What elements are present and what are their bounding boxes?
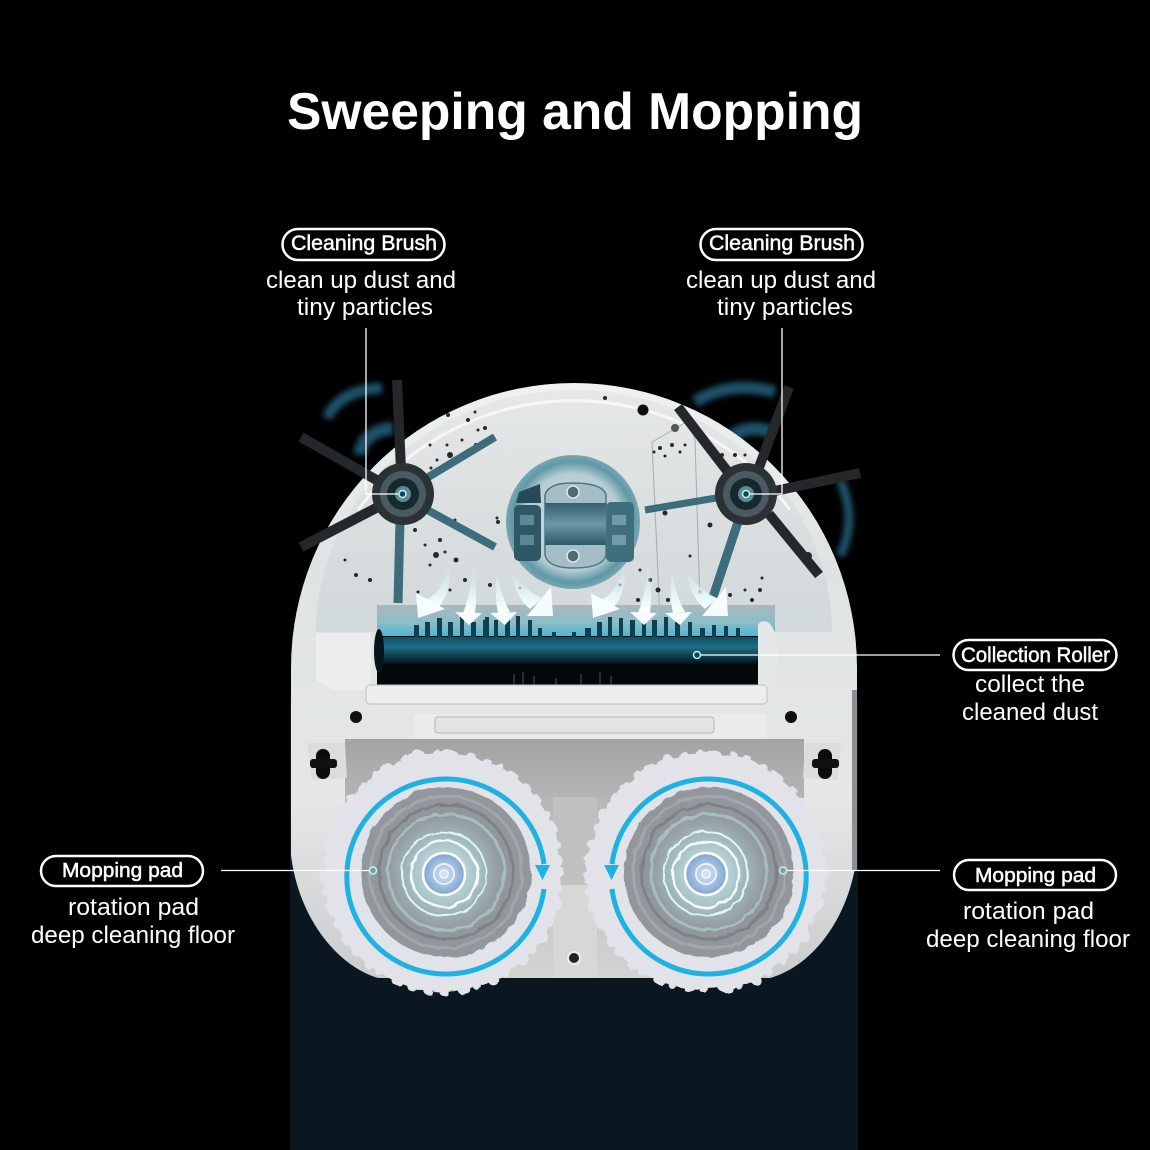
description <box>926 898 1130 953</box>
cavity <box>377 605 775 640</box>
airflow arrows: left group <box>416 560 553 625</box>
description <box>266 267 456 321</box>
mopping pad left <box>324 753 562 991</box>
screw top <box>567 486 579 498</box>
pill label: Cleaning Brush <box>709 232 855 255</box>
caster wheel right <box>803 743 841 780</box>
right wheel <box>606 502 634 562</box>
callout: right mopping pad <box>780 860 1130 953</box>
tray lip <box>366 685 767 704</box>
description: tiny particles <box>297 294 433 321</box>
side brush hub: left <box>372 463 434 525</box>
dome plate <box>316 390 832 632</box>
pill label: Mopping pad <box>975 865 1096 887</box>
side brush dark arms: left <box>301 380 401 547</box>
pill label <box>41 856 203 886</box>
pill label: Collection Roller <box>961 644 1110 667</box>
pill label: Cleaning Brush <box>291 232 437 255</box>
title: Sweeping and Mopping <box>287 83 863 141</box>
description <box>31 894 235 949</box>
dark floor panel <box>290 700 858 1150</box>
collection roller assembly <box>316 605 778 704</box>
control panel outline <box>652 420 700 620</box>
callout: left mopping pad <box>31 856 376 949</box>
left wheel <box>514 484 541 561</box>
description <box>962 671 1098 726</box>
spiral core <box>685 853 727 895</box>
leader line <box>742 328 782 498</box>
center column <box>553 797 597 885</box>
lower comb <box>514 672 611 685</box>
pill label: Mopping pad <box>62 860 183 882</box>
pill label <box>282 229 444 260</box>
leader line <box>780 867 940 874</box>
description: rotation pad <box>963 898 1094 925</box>
callout: right cleaning brush <box>686 229 876 498</box>
description: clean up dust and <box>686 267 876 294</box>
spiral core <box>423 853 465 895</box>
wheel module <box>545 483 606 568</box>
side brush teal arms: left <box>398 437 495 603</box>
leader line <box>221 867 376 874</box>
side brush teal arms: right <box>645 497 738 597</box>
pad fibres <box>361 787 531 957</box>
description: collect the <box>975 671 1085 698</box>
wheel well <box>506 455 640 589</box>
callout: left cleaning brush <box>266 229 456 498</box>
water tank bar <box>414 714 767 739</box>
leader line <box>366 328 406 498</box>
dust particles <box>344 396 812 602</box>
lower gray mop bay <box>345 739 804 978</box>
end cap <box>758 621 778 686</box>
pill label <box>700 229 862 260</box>
bristles <box>414 616 740 641</box>
robot body <box>291 383 857 978</box>
caster wheel left <box>307 743 347 780</box>
pad fibres <box>624 787 794 957</box>
description: cleaned dust <box>962 699 1098 726</box>
pad cloth <box>324 753 562 991</box>
left block <box>316 633 371 690</box>
drain hole <box>568 952 580 964</box>
right edge shading <box>852 690 857 870</box>
axle band <box>545 503 606 545</box>
rotation swirl: right brush <box>695 388 849 556</box>
mopping pad right <box>587 753 825 991</box>
rotation arrow <box>347 779 550 974</box>
pill label <box>954 860 1116 890</box>
side brush hub: right <box>715 463 777 525</box>
side brush dark arms: right <box>678 387 860 575</box>
description: deep cleaning floor <box>926 926 1130 953</box>
description: deep cleaning floor <box>31 922 235 949</box>
airflow arrows: right group <box>591 560 728 625</box>
description: tiny particles <box>717 294 853 321</box>
rotation swirl: left brush <box>327 388 393 455</box>
screw bottom <box>567 550 579 562</box>
pad cloth <box>587 753 825 991</box>
callout: collection roller <box>694 640 1116 726</box>
screw hole right <box>785 711 797 723</box>
description <box>686 267 876 321</box>
description: clean up dust and <box>266 267 456 294</box>
leader line <box>694 652 940 658</box>
roller <box>378 637 766 665</box>
rotation arrow <box>604 779 806 974</box>
description: rotation pad <box>68 894 199 921</box>
screw hole left <box>350 711 362 723</box>
dome top rim <box>358 401 790 510</box>
